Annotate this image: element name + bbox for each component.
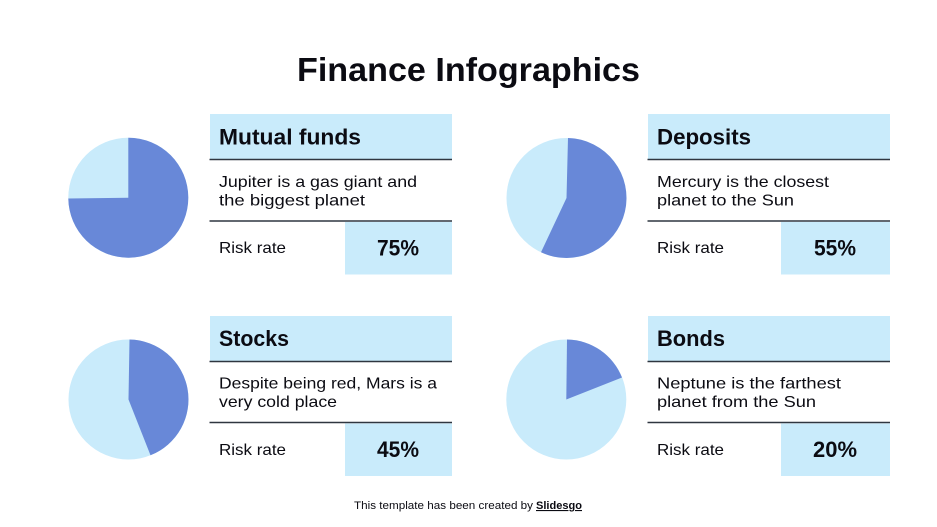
description: stocks: very cold place xyxy=(219,394,337,411)
title: Finance Infographics xyxy=(297,51,640,88)
description: deposits: planet to the Sun xyxy=(657,192,794,210)
risk value: 75%: 75% xyxy=(377,236,419,260)
heading band: stocks xyxy=(210,316,452,361)
pie chart: bonds 20% xyxy=(506,340,626,460)
footer credit: Slidesgo xyxy=(536,500,582,512)
risk value: 20%: 20% xyxy=(813,437,857,462)
description: deposits: Mercury is the closest xyxy=(657,174,830,191)
risk value: 45% xyxy=(345,424,452,476)
description: bonds: planet from the Sun xyxy=(657,394,816,411)
heading band: mutual funds xyxy=(210,114,452,159)
risk rate label: mutual funds: Risk rate xyxy=(219,240,286,257)
description: mutual funds: Jupiter is a gas giant and xyxy=(219,174,417,191)
risk rate label: deposits: Risk rate xyxy=(657,240,724,257)
heading band: mutual funds: Mutual funds xyxy=(219,124,361,150)
heading band: bonds: Bonds xyxy=(657,326,725,351)
description: mutual funds xyxy=(219,174,417,210)
description: stocks: Despite being red, Mars is a xyxy=(219,376,437,392)
description: deposits xyxy=(657,174,830,210)
heading band: bonds xyxy=(648,316,890,361)
panel: mutual funds xyxy=(68,114,452,274)
risk value: 45%: 45% xyxy=(377,437,419,462)
risk rate label: bonds: Risk rate xyxy=(657,442,724,459)
heading band: deposits xyxy=(648,114,890,159)
footer credit: This template has been created by xyxy=(354,500,534,512)
panel: deposits xyxy=(506,114,890,274)
panel: stocks xyxy=(68,316,452,476)
pie chart: stocks 45% xyxy=(68,340,188,460)
description: bonds: Neptune is the farthest xyxy=(657,376,842,392)
pie chart: mutual funds 75% xyxy=(68,138,188,258)
risk value: 55%: 55% xyxy=(814,236,856,260)
risk value: 75% xyxy=(345,222,452,274)
description: mutual funds: the biggest planet xyxy=(219,192,366,210)
pie chart: deposits 55% xyxy=(506,138,626,258)
panel: bonds xyxy=(506,316,890,476)
heading band: stocks: Stocks xyxy=(219,326,289,351)
risk value: 55% xyxy=(781,222,890,274)
description: bonds xyxy=(657,376,842,411)
risk value: 20% xyxy=(781,424,890,476)
description: stocks xyxy=(219,376,437,411)
heading band: deposits: Deposits xyxy=(657,124,751,150)
risk rate label: stocks: Risk rate xyxy=(219,442,286,459)
